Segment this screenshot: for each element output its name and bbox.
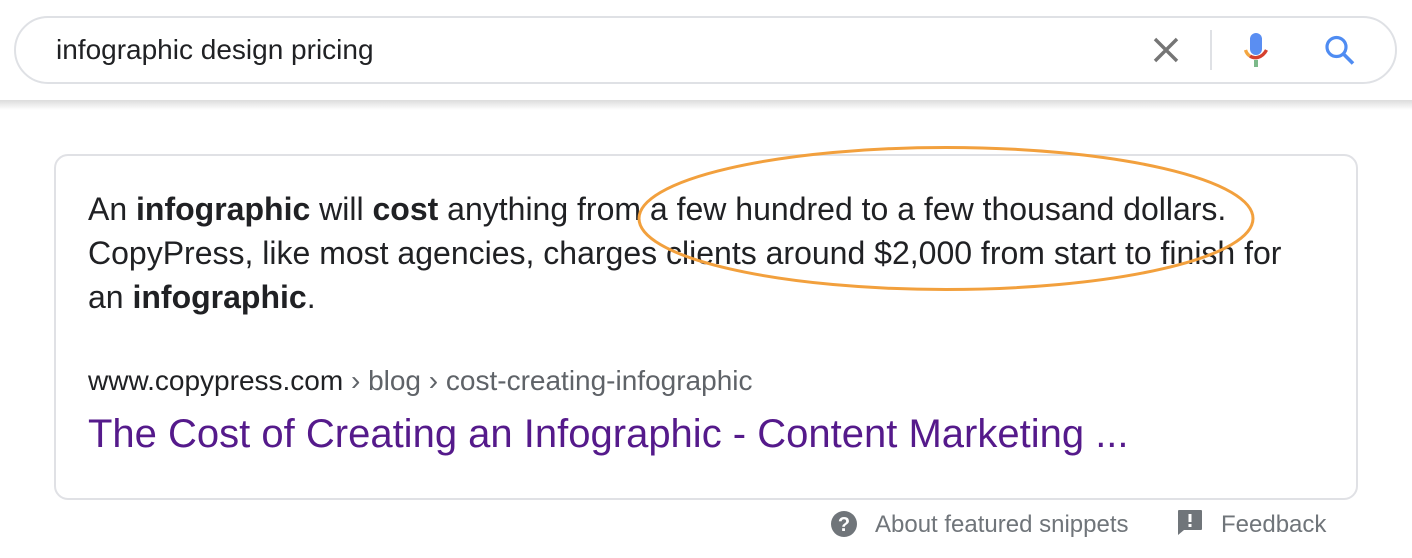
result link title: The Cost of Creating an Infographic - Content Marketing ... bbox=[88, 412, 1129, 456]
about featured snippets label: About featured snippets bbox=[875, 511, 1129, 538]
icon: help: ? bbox=[838, 514, 850, 536]
snippet text: An infographic will cost anything from a few hundred to a few thousand dollars. bbox=[88, 191, 1226, 227]
snippet text: an infographic. bbox=[88, 279, 316, 315]
icon: clear X bbox=[1154, 38, 1178, 62]
source breadcrumb: www.copypress.com › blog › cost-creating-infographic bbox=[88, 365, 752, 396]
icon: feedback bbox=[1178, 510, 1202, 535]
snippet text bbox=[88, 191, 1281, 315]
feedback label: Feedback bbox=[1221, 511, 1326, 538]
icon: search magnifier bbox=[1325, 36, 1354, 65]
header shadow bbox=[0, 100, 1412, 110]
search query text: infographic design pricing bbox=[56, 34, 374, 65]
icon: help bbox=[831, 511, 857, 537]
search box divider bbox=[1210, 30, 1212, 70]
snippet text: CopyPress, like most agencies, charges clients around $2,000 from start to finish for bbox=[88, 235, 1281, 271]
panel: featured snippet bbox=[54, 154, 1358, 500]
icon: microphone bbox=[1244, 33, 1268, 67]
search box bbox=[14, 16, 1397, 84]
